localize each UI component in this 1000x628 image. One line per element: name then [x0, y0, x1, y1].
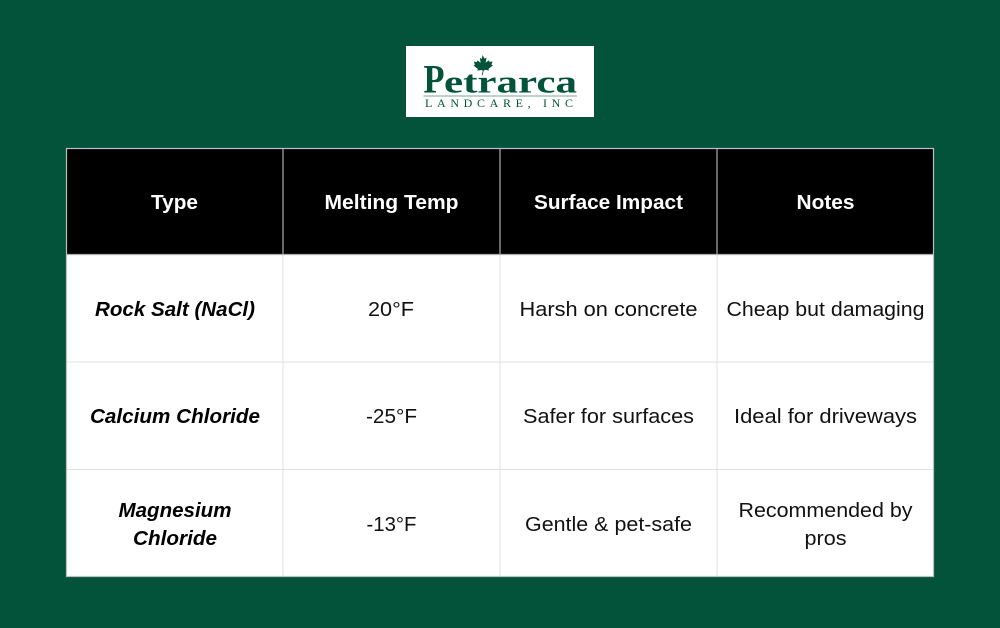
- logo subtitle: LANDCARE, INC: [425, 96, 573, 110]
- surface impact: safer: Safer for surfaces: [523, 406, 694, 428]
- notes: recommended: Recommended by: [738, 500, 912, 522]
- notes: driveways: Ideal for driveways: [734, 406, 917, 428]
- notes: recommended: [738, 500, 912, 550]
- type: magnesium chloride: [118, 500, 232, 550]
- header row: [151, 192, 854, 214]
- table: [66, 148, 934, 577]
- melting temp: 20°F: 20°F: [368, 299, 414, 321]
- melting temp: -13°F: -13°F: [366, 514, 416, 536]
- row: calcium chloride: [90, 406, 917, 428]
- type: rock salt: Rock Salt (NaCl): [95, 299, 255, 321]
- row: rock salt: [95, 299, 924, 321]
- header: Type: Type: [151, 192, 198, 214]
- logo: [406, 46, 594, 117]
- logo rule: [424, 96, 577, 97]
- header: Notes: Notes: [796, 192, 854, 214]
- header row background: [66, 148, 934, 254]
- header: Surface Impact: Surface Impact: [534, 192, 683, 214]
- melting temp: -25°F: -25°F: [366, 406, 417, 428]
- type: magnesium chloride: Chloride: [133, 528, 217, 550]
- notes: cheap: Cheap but damaging: [726, 299, 924, 321]
- surface impact: harsh: Harsh on concrete: [520, 299, 698, 321]
- surface impact: gentle: Gentle & pet-safe: [525, 514, 692, 536]
- type: calcium chloride: Calcium Chloride: [90, 406, 260, 428]
- type: magnesium chloride: Magnesium: [118, 500, 232, 522]
- logo wordmark: etrarca: [444, 64, 577, 100]
- notes: recommended: pros: [804, 528, 846, 550]
- logo wordmark: P: [424, 56, 444, 102]
- header: Melting Temp: Melting Temp: [324, 192, 458, 214]
- table body background: [66, 148, 934, 577]
- row: magnesium chloride: [118, 500, 912, 550]
- logo wordmark: [424, 56, 577, 102]
- icon: maple leaf: [473, 55, 493, 75]
